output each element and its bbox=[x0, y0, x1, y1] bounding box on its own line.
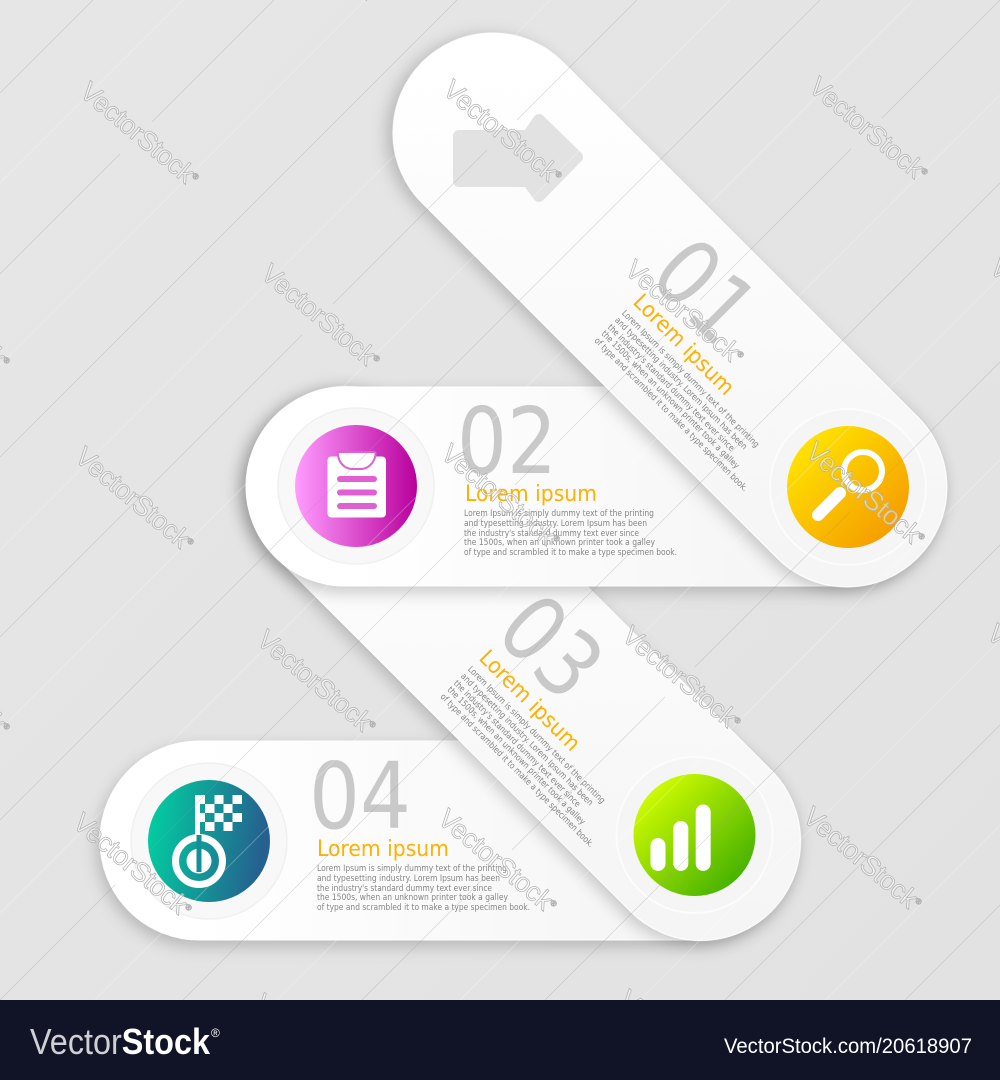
text block 01: of type and scrambled it to make a type specimen book. bbox=[592, 336, 749, 494]
watermarks: ® bbox=[551, 533, 562, 544]
text block 02 bbox=[457, 388, 677, 558]
text block 03: Lorem Ipsum is simply dummy text of the printing bbox=[465, 665, 607, 806]
text block 04: of type and scrambled it to make a type specimen book. bbox=[317, 903, 530, 913]
watermarks: ® bbox=[185, 536, 196, 547]
watermarks: VectorStock bbox=[619, 254, 746, 367]
icon: bar chart bbox=[650, 804, 711, 871]
text block 02: Lorem ipsum bbox=[465, 482, 597, 507]
icon circle 2 bbox=[295, 425, 417, 547]
watermarks: VectorStock bbox=[432, 803, 559, 916]
text block 03: Lorem ipsum bbox=[474, 646, 585, 757]
icon circle 3 bbox=[634, 774, 756, 896]
text block 03: and typesetting industry. Lorem Ipsum has been bbox=[458, 672, 595, 808]
text block 01: and typesetting industry. Lorem Ipsum has been bbox=[612, 316, 749, 452]
icon: clipboard bbox=[328, 452, 386, 518]
panel: strip 2 bbox=[246, 387, 946, 586]
text block 01: Lorem ipsum bbox=[628, 290, 739, 401]
text block 02: the industry's standard dummy text ever since bbox=[464, 529, 639, 539]
text block 03: 03 bbox=[477, 574, 624, 721]
panel: strip 1 bbox=[352, 0, 988, 628]
watermarks: VectorStock bbox=[255, 258, 382, 371]
text block 04: the industry's standard dummy text ever since bbox=[317, 884, 492, 894]
watermarks: VectorStock bbox=[800, 436, 927, 549]
text block 01: Lorem Ipsum is simply dummy text of the printing bbox=[619, 309, 761, 450]
text block 04: Lorem ipsum bbox=[317, 837, 449, 862]
footer bar bbox=[0, 1000, 1000, 1080]
watermarks: VectorStock bbox=[437, 74, 564, 187]
watermarks: ® bbox=[916, 531, 927, 542]
icon ring 4 bbox=[131, 763, 287, 919]
watermarks: ® bbox=[1, 355, 12, 366]
icon circle 1 bbox=[787, 426, 909, 548]
text block 03: the industry's standard dummy text ever since bbox=[451, 679, 582, 810]
text block 01: the 1500s, when an unknown printer took a galley bbox=[599, 329, 741, 471]
icon ring 2 bbox=[278, 408, 434, 564]
watermarks: ® bbox=[919, 166, 930, 177]
text block 04: 04 bbox=[309, 743, 411, 850]
watermarks: ® bbox=[735, 349, 746, 360]
watermarks: VectorStock bbox=[251, 624, 378, 737]
watermarks: VectorStock bbox=[803, 71, 930, 184]
text block 02: of type and scrambled it to make a type specimen book. bbox=[464, 548, 677, 558]
text block 02: the 1500s, when an unknown printer took a galley bbox=[464, 538, 655, 548]
watermarks: ® bbox=[367, 719, 378, 730]
watermarks: VectorStock bbox=[74, 76, 201, 189]
watermarks: ® bbox=[371, 353, 382, 364]
watermarks: VectorStock bbox=[67, 807, 194, 920]
text block 02: and typesetting industry. Lorem Ipsum has been bbox=[464, 519, 647, 529]
icon: checkered flag bbox=[176, 795, 242, 884]
footer url: VectorStock.com/20618907 bbox=[724, 1035, 972, 1058]
watermarks: VectorStock bbox=[435, 438, 562, 551]
text block 04 bbox=[309, 743, 530, 913]
text block 01: the industry's standard dummy text ever since bbox=[605, 323, 736, 454]
icon: magnifying glass bbox=[818, 452, 882, 515]
watermarks: VectorStock bbox=[616, 620, 743, 733]
footer logo: VectorStock bbox=[30, 1021, 211, 1062]
watermarks: ® bbox=[553, 169, 564, 180]
text block 04: and typesetting industry. Lorem Ipsum has been bbox=[317, 874, 500, 884]
icon circle 4 bbox=[148, 780, 270, 902]
text block 01 bbox=[587, 218, 863, 494]
text block 03: of type and scrambled it to make a type specimen book. bbox=[438, 692, 595, 850]
text block 04: the 1500s, when an unknown printer took a galley bbox=[317, 893, 508, 903]
text block 02: 02 bbox=[457, 388, 557, 495]
watermarks: ® bbox=[1, 721, 12, 732]
icon: arrow cutout bbox=[459, 120, 577, 196]
watermarks: ® bbox=[548, 898, 559, 909]
watermarks: ® bbox=[190, 171, 201, 182]
text block 02: Lorem Ipsum is simply dummy text of the printing bbox=[464, 509, 654, 519]
watermarks: ® bbox=[732, 715, 743, 726]
watermarks: ® bbox=[913, 896, 924, 907]
text block 04: Lorem Ipsum is simply dummy text of the printing bbox=[317, 864, 507, 874]
text block 01: 01 bbox=[631, 218, 778, 365]
watermarks: ® bbox=[183, 902, 194, 913]
icon ring 1 bbox=[770, 409, 926, 565]
text block 03: the 1500s, when an unknown printer took a galley bbox=[445, 685, 587, 827]
text block 03 bbox=[433, 574, 709, 850]
panel: strip 3 bbox=[205, 345, 842, 982]
footer registered mark: ® bbox=[211, 1026, 220, 1040]
watermarks: VectorStock bbox=[797, 801, 924, 914]
icon ring 3 bbox=[616, 757, 772, 913]
watermarks: VectorStock bbox=[69, 441, 196, 554]
panel: strip 4 bbox=[100, 741, 800, 940]
